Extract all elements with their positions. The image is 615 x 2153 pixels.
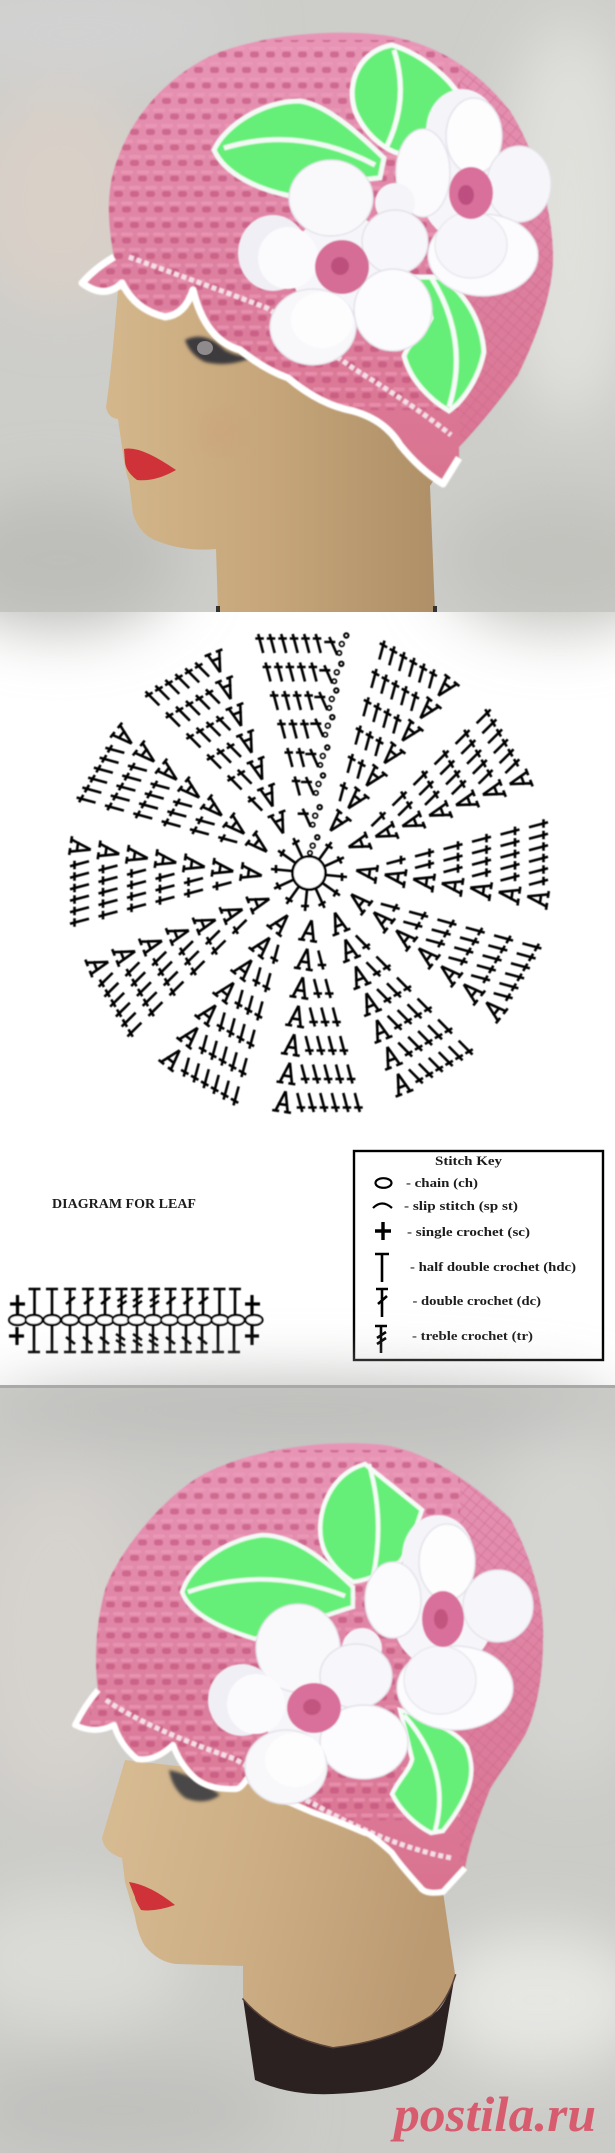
photo background	[0, 1380, 615, 2153]
watermark: postila.ru: postila.ru	[390, 2086, 596, 2142]
photo: crocheted hat on mannequin, side view	[0, 1380, 615, 2153]
leaf: lower right	[404, 277, 484, 411]
photo background	[0, 0, 615, 630]
mannequin head	[106, 290, 460, 612]
mannequin lips	[124, 448, 176, 480]
key: slip stitch: - slip stitch (sp st)	[404, 1199, 518, 1213]
wedge: south	[272, 890, 363, 1113]
key: double crochet	[376, 1289, 541, 1317]
key: half double crochet: - half double crochet (hdc)	[410, 1260, 576, 1274]
mannequin head	[102, 1760, 460, 2047]
wedge: southwest	[83, 850, 321, 1039]
key: half double crochet	[375, 1254, 576, 1282]
crochet hat	[82, 33, 560, 484]
flower: left	[208, 1604, 408, 1804]
crochet hat	[75, 1443, 560, 1893]
flower: right	[396, 89, 551, 296]
key: chain	[376, 1176, 478, 1190]
lower stitch row	[9, 1325, 259, 1352]
key: chain: - chain (ch)	[406, 1176, 478, 1190]
chart: leaf stitch diagram	[9, 1289, 262, 1352]
wedge: west-northwest	[74, 721, 313, 911]
flower centre	[287, 1683, 341, 1733]
wedge: southeast	[286, 861, 475, 1099]
wedge: north-northeast	[271, 638, 461, 877]
panel: stitch key	[354, 1151, 603, 1360]
key heading: Stitch Key	[435, 1154, 503, 1168]
flower centre	[449, 167, 493, 219]
mannequin eye	[185, 337, 255, 364]
key: treble crochet	[375, 1326, 533, 1353]
photo: crocheted hat on mannequin, front view	[0, 0, 615, 630]
chain row	[9, 1315, 262, 1325]
leaf: upper	[320, 1464, 422, 1582]
mannequin lips	[129, 1882, 175, 1910]
key: double crochet: - double crochet (dc)	[412, 1294, 541, 1308]
leaf: upper	[352, 45, 459, 154]
leaf: lower right	[392, 1710, 471, 1833]
mannequin eye	[169, 1770, 220, 1801]
mannequin stand collar	[243, 1974, 455, 2094]
wedge: east	[326, 819, 549, 910]
flower centre	[315, 240, 369, 294]
heading: diagram for leaf: DIAGRAM FOR LEAF	[52, 1196, 196, 1211]
flower: left	[238, 160, 432, 365]
wedge: north-northwest	[143, 647, 332, 885]
flower centre	[422, 1591, 464, 1647]
leaf: left	[214, 101, 384, 196]
wedge: south-southwest	[157, 869, 347, 1108]
key: slip stitch	[373, 1199, 518, 1213]
upper stitch row	[10, 1289, 260, 1316]
key: treble crochet: - treble crochet (tr)	[412, 1329, 533, 1343]
chart: circular crown stitch diagram	[69, 633, 549, 1113]
wedge: north, straight stitches	[255, 634, 321, 796]
flower: right	[365, 1515, 533, 1730]
key: single crochet: - single crochet (sc)	[407, 1225, 530, 1239]
wedge: east-northeast	[297, 707, 535, 896]
key: single crochet	[375, 1222, 530, 1240]
wedge: east-southeast	[305, 835, 544, 1025]
wedge: north, chain column	[298, 633, 348, 855]
centre ring	[292, 856, 326, 890]
leaf: left	[182, 1535, 353, 1639]
wedge: west	[69, 836, 292, 927]
